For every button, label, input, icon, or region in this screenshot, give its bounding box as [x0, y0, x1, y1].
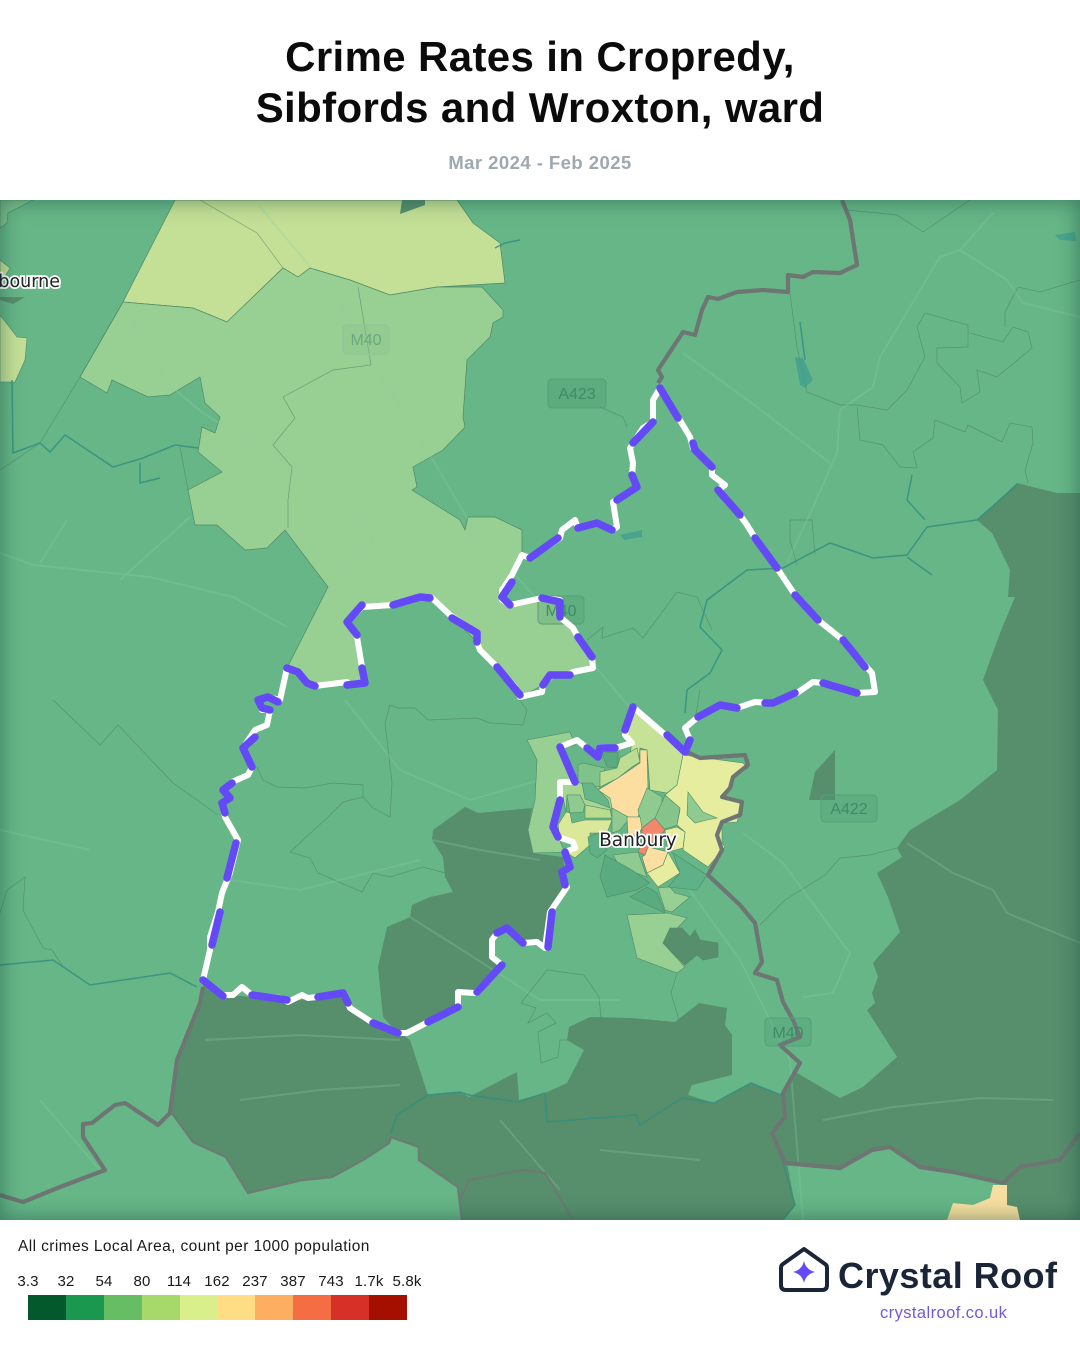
- area: higher-rate yellow-green zone north: [123, 200, 505, 322]
- area: county boundary around dark zone: [172, 1113, 573, 1220]
- ward boundary: blue dashes: [203, 388, 865, 1033]
- legend title: All crimes Local Area, count per 1000 population: [18, 1238, 370, 1254]
- road label: M40 south: [765, 1018, 811, 1046]
- road label: M40 south: M40: [772, 1025, 804, 1042]
- county boundary crossing M40 label: [777, 1020, 802, 1046]
- area: lower-crime dark green zones: [0, 200, 1080, 1220]
- title: Sibfords and Wroxton, ward: [256, 84, 824, 131]
- road label: M40 middle: [538, 596, 584, 624]
- legend scale values: [17, 1273, 422, 1290]
- area: rivers: [0, 240, 1017, 1220]
- legend: 387: [280, 1273, 306, 1290]
- legend colour swatches: [28, 1295, 407, 1320]
- area: light green zone northwest of ward: [80, 268, 593, 697]
- logo wordmark: Crystal Roof: [838, 1255, 1057, 1296]
- legend: 114: [167, 1273, 191, 1290]
- road label: M40 north: [343, 325, 389, 354]
- area: district boundary lines: [0, 200, 1080, 1063]
- road label: A423: [548, 379, 606, 408]
- ward boundary: white base line: [203, 388, 875, 1033]
- icon: house with star: [779, 1247, 829, 1292]
- area: water bodies: [620, 232, 1076, 540]
- legend: 743: [318, 1273, 344, 1290]
- road labels: [343, 325, 877, 1046]
- road label: M40 north: M40: [350, 332, 382, 349]
- road label: M40 middle: M40: [545, 603, 577, 620]
- legend: 80: [134, 1273, 150, 1290]
- legend: 5.8k: [393, 1273, 421, 1290]
- legend: [17, 1238, 422, 1320]
- legend: 1.7k: [355, 1273, 383, 1290]
- area: county boundary lines: [0, 200, 1080, 1202]
- legend: 237: [242, 1273, 268, 1290]
- logo: Crystal Roof: [779, 1247, 1058, 1322]
- map edge vignette: [0, 200, 1080, 1220]
- legend: 162: [204, 1273, 230, 1290]
- area: Banbury neighbourhoods: [527, 707, 748, 973]
- legend: 32: [58, 1273, 74, 1290]
- road label: A422: [821, 795, 877, 822]
- road label: A423: A423: [558, 386, 596, 403]
- road label: A422: A422: [830, 801, 868, 818]
- website link: crystalroof.co.uk: [880, 1304, 1007, 1322]
- legend: 3.3: [17, 1273, 39, 1290]
- legend: 54: [96, 1273, 112, 1290]
- title: [256, 33, 824, 131]
- area: faint roads: [0, 207, 1080, 1220]
- area: small lighter zones at far left: [0, 200, 33, 382]
- place label: Banbury: Banbury: [599, 830, 677, 851]
- place label: town name fragment at left edge: bourne: [0, 272, 60, 292]
- subtitle: date range: Mar 2024 - Feb 2025: [448, 152, 632, 173]
- area: small yellow zone bottom right: [947, 1185, 1020, 1220]
- choropleth map: [0, 200, 1080, 1220]
- title: Crime Rates in Cropredy,: [285, 33, 795, 80]
